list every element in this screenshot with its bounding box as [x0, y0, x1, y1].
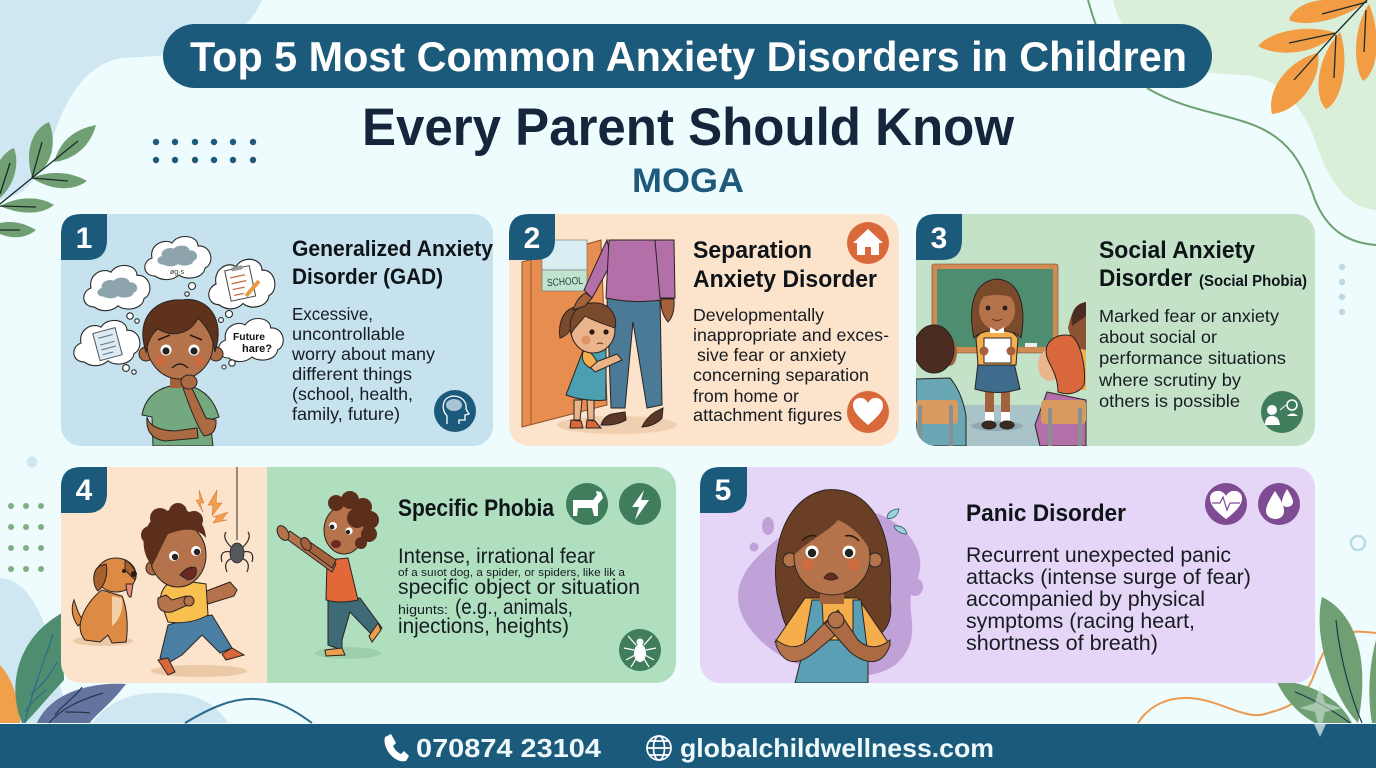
subtitle: Every Parent Should Know: [362, 98, 1015, 157]
card 1 title: Disorder (GAD): [292, 264, 443, 289]
classroom scene: [914, 264, 1086, 446]
card 2 badge: 2: [524, 222, 540, 255]
presenting girl: [971, 279, 1023, 431]
card 2 description: [693, 305, 889, 425]
card 4 background: [61, 467, 676, 683]
card 4 icon: lightning: [619, 483, 661, 525]
card 5 description: Recurrent unexpected panic: [966, 544, 1231, 567]
card 1 title: Generalized Anxiety: [292, 236, 494, 261]
card 4 description: (e.g., animals,: [455, 596, 573, 619]
card 4 badge: [61, 467, 107, 513]
card 2 description: sive fear or anxiety: [697, 345, 846, 365]
dot column: right: [1339, 264, 1345, 315]
card 5 badge: 5: [715, 474, 731, 507]
card 5 description: accompanied by physical: [966, 588, 1205, 611]
school door: SCHOOL: [547, 275, 584, 289]
card 5 icon: heart rate: [1205, 483, 1247, 525]
backing-away boy: [275, 491, 382, 659]
card 3: Social Anxiety Disorder: [914, 214, 1315, 446]
card 2 title: [693, 237, 877, 293]
card 4 description: of a suıot dog, a spider, or spiders, like lik a: [398, 567, 626, 579]
card 3 description: others is possible: [1099, 391, 1240, 411]
card 3 description: about social or: [1099, 327, 1217, 347]
card 4 description: higunts:: [398, 602, 448, 617]
ground shadow: [557, 416, 677, 434]
dot grid: top: [153, 139, 256, 163]
card 5 description: [966, 544, 1251, 655]
card 2 description: inappropriate and exces-: [693, 325, 889, 345]
card 4 description: [398, 545, 640, 638]
card 3 background: [916, 214, 1315, 446]
card 1 badge: 1: [76, 222, 92, 255]
card 1 description: [291, 304, 435, 424]
icon: globe: [647, 736, 671, 760]
worried girl: [775, 490, 891, 683]
card 3 badge: 3: [931, 222, 947, 255]
card 5: Panic Disorder: [700, 467, 1315, 683]
card 2 badge: [509, 214, 555, 260]
card 5 icon: water drops: [1258, 483, 1300, 525]
card 4 description: Intense, irrational fear: [398, 545, 595, 568]
leaves: top left branch: [0, 122, 96, 237]
icon: phone: [384, 734, 409, 761]
title banner: Top 5 Most Common Anxiety Disorders in Children: [190, 33, 1187, 80]
card 3 title: Disorder: [1099, 265, 1192, 292]
card 4 description: specific object or situation: [398, 576, 640, 599]
card 5 description: symptoms (racing heart,: [966, 610, 1195, 633]
card 3 badge: [916, 214, 962, 260]
thought bubbles: [74, 237, 283, 374]
purple blob behind girl: [738, 510, 923, 676]
card 2 title: Separation: [693, 237, 812, 264]
card 1 icon: brain head: [434, 390, 476, 432]
card 2 description: concerning separation: [693, 365, 869, 385]
spider: [221, 467, 253, 572]
lightning marks: [196, 490, 228, 523]
card 2 background: [509, 214, 899, 446]
girl figure: [560, 293, 622, 428]
seated classmate behind: [1068, 302, 1086, 390]
card 1 description: different things: [292, 364, 412, 384]
sweat drops: [887, 509, 907, 534]
card 1 description: uncontrollable: [292, 324, 405, 344]
card 3 title: Social Anxiety: [1099, 237, 1256, 264]
card 2 description: Developmentally: [693, 305, 824, 325]
card 4: Specific Phobia: [61, 467, 676, 683]
card 5 title: Panic Disorder: [966, 500, 1126, 527]
card 5 background: [700, 467, 1315, 683]
leaves: bottom left: [0, 613, 126, 723]
footer bar: [0, 724, 1376, 768]
card 1: Generalized Anxiety Disorder: [61, 214, 494, 446]
bubble contents: Future: [233, 331, 265, 343]
card 2: Separation Anxiety Disorder: [509, 214, 899, 446]
card 4 description: injections, heights): [398, 615, 569, 638]
card 2 icon: heart: [847, 391, 889, 433]
card 2 description: attachment figures: [693, 405, 842, 425]
seated girl: [1035, 335, 1086, 446]
card 2 description: from home or: [693, 386, 799, 406]
mother figure: [584, 240, 675, 427]
bubble contents: øg·s: [170, 269, 184, 276]
dot grid: left: [8, 503, 44, 572]
boy character: [139, 300, 223, 446]
card 1 description: family, future): [292, 404, 400, 424]
card 3 description: [1098, 306, 1286, 411]
card 3 description: where scrutiny by: [1098, 370, 1241, 390]
website: globalchildwellness.com: [680, 733, 994, 763]
bubble contents: hare?: [242, 343, 272, 355]
card 5 description: attacks (intense surge of fear): [966, 566, 1251, 589]
card 1 background: [61, 214, 493, 446]
card 1 title: [292, 236, 494, 289]
bubble contents: [93, 246, 272, 361]
card 3 title: [1099, 237, 1307, 292]
card 3 description: performance situations: [1099, 348, 1286, 368]
school door: [522, 240, 607, 427]
card 2 icon: house: [847, 222, 889, 264]
card 4 icon: spider: [619, 629, 661, 671]
dog: [72, 558, 137, 646]
location label: MOGA: [632, 162, 744, 200]
card 3 icon: social group: [1261, 391, 1303, 433]
card 4 badge: 4: [76, 474, 93, 507]
leaves: bottom right: [1277, 597, 1376, 732]
scared boy with spider: [141, 503, 247, 677]
card 2 title: Anxiety Disorder: [693, 266, 877, 293]
card 5 badge: [700, 467, 747, 513]
phone number: 070874 23104: [416, 733, 602, 763]
card 1 description: Excessive,: [292, 304, 373, 324]
seated boy: [914, 325, 966, 446]
card 3 description: Marked fear or anxiety: [1099, 306, 1279, 326]
card 1 description: (school, health,: [292, 384, 413, 404]
card 1 badge: [61, 214, 107, 260]
card 4 title: Specific Phobia: [398, 495, 555, 522]
card 3 title: (Social Phobia): [1199, 273, 1307, 290]
card 5 description: shortness of breath): [966, 632, 1158, 655]
card 1 description: worry about many: [291, 344, 435, 364]
card 4 icon: dog: [566, 483, 608, 525]
leaves: top right orange branch: [1258, 0, 1376, 114]
